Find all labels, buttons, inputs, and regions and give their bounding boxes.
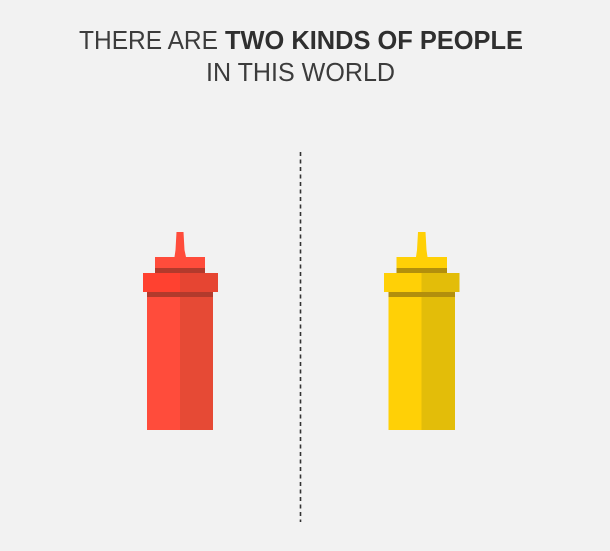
title: TWO KINDS OF PEOPLE [225, 25, 523, 55]
title: THERE ARE [79, 25, 218, 55]
title: IN THIS WORLD [206, 57, 395, 87]
icon: ketchup bottle [143, 232, 218, 430]
icon: mustard bottle [384, 232, 460, 430]
dashed divider [300, 152, 302, 522]
title [79, 25, 523, 87]
